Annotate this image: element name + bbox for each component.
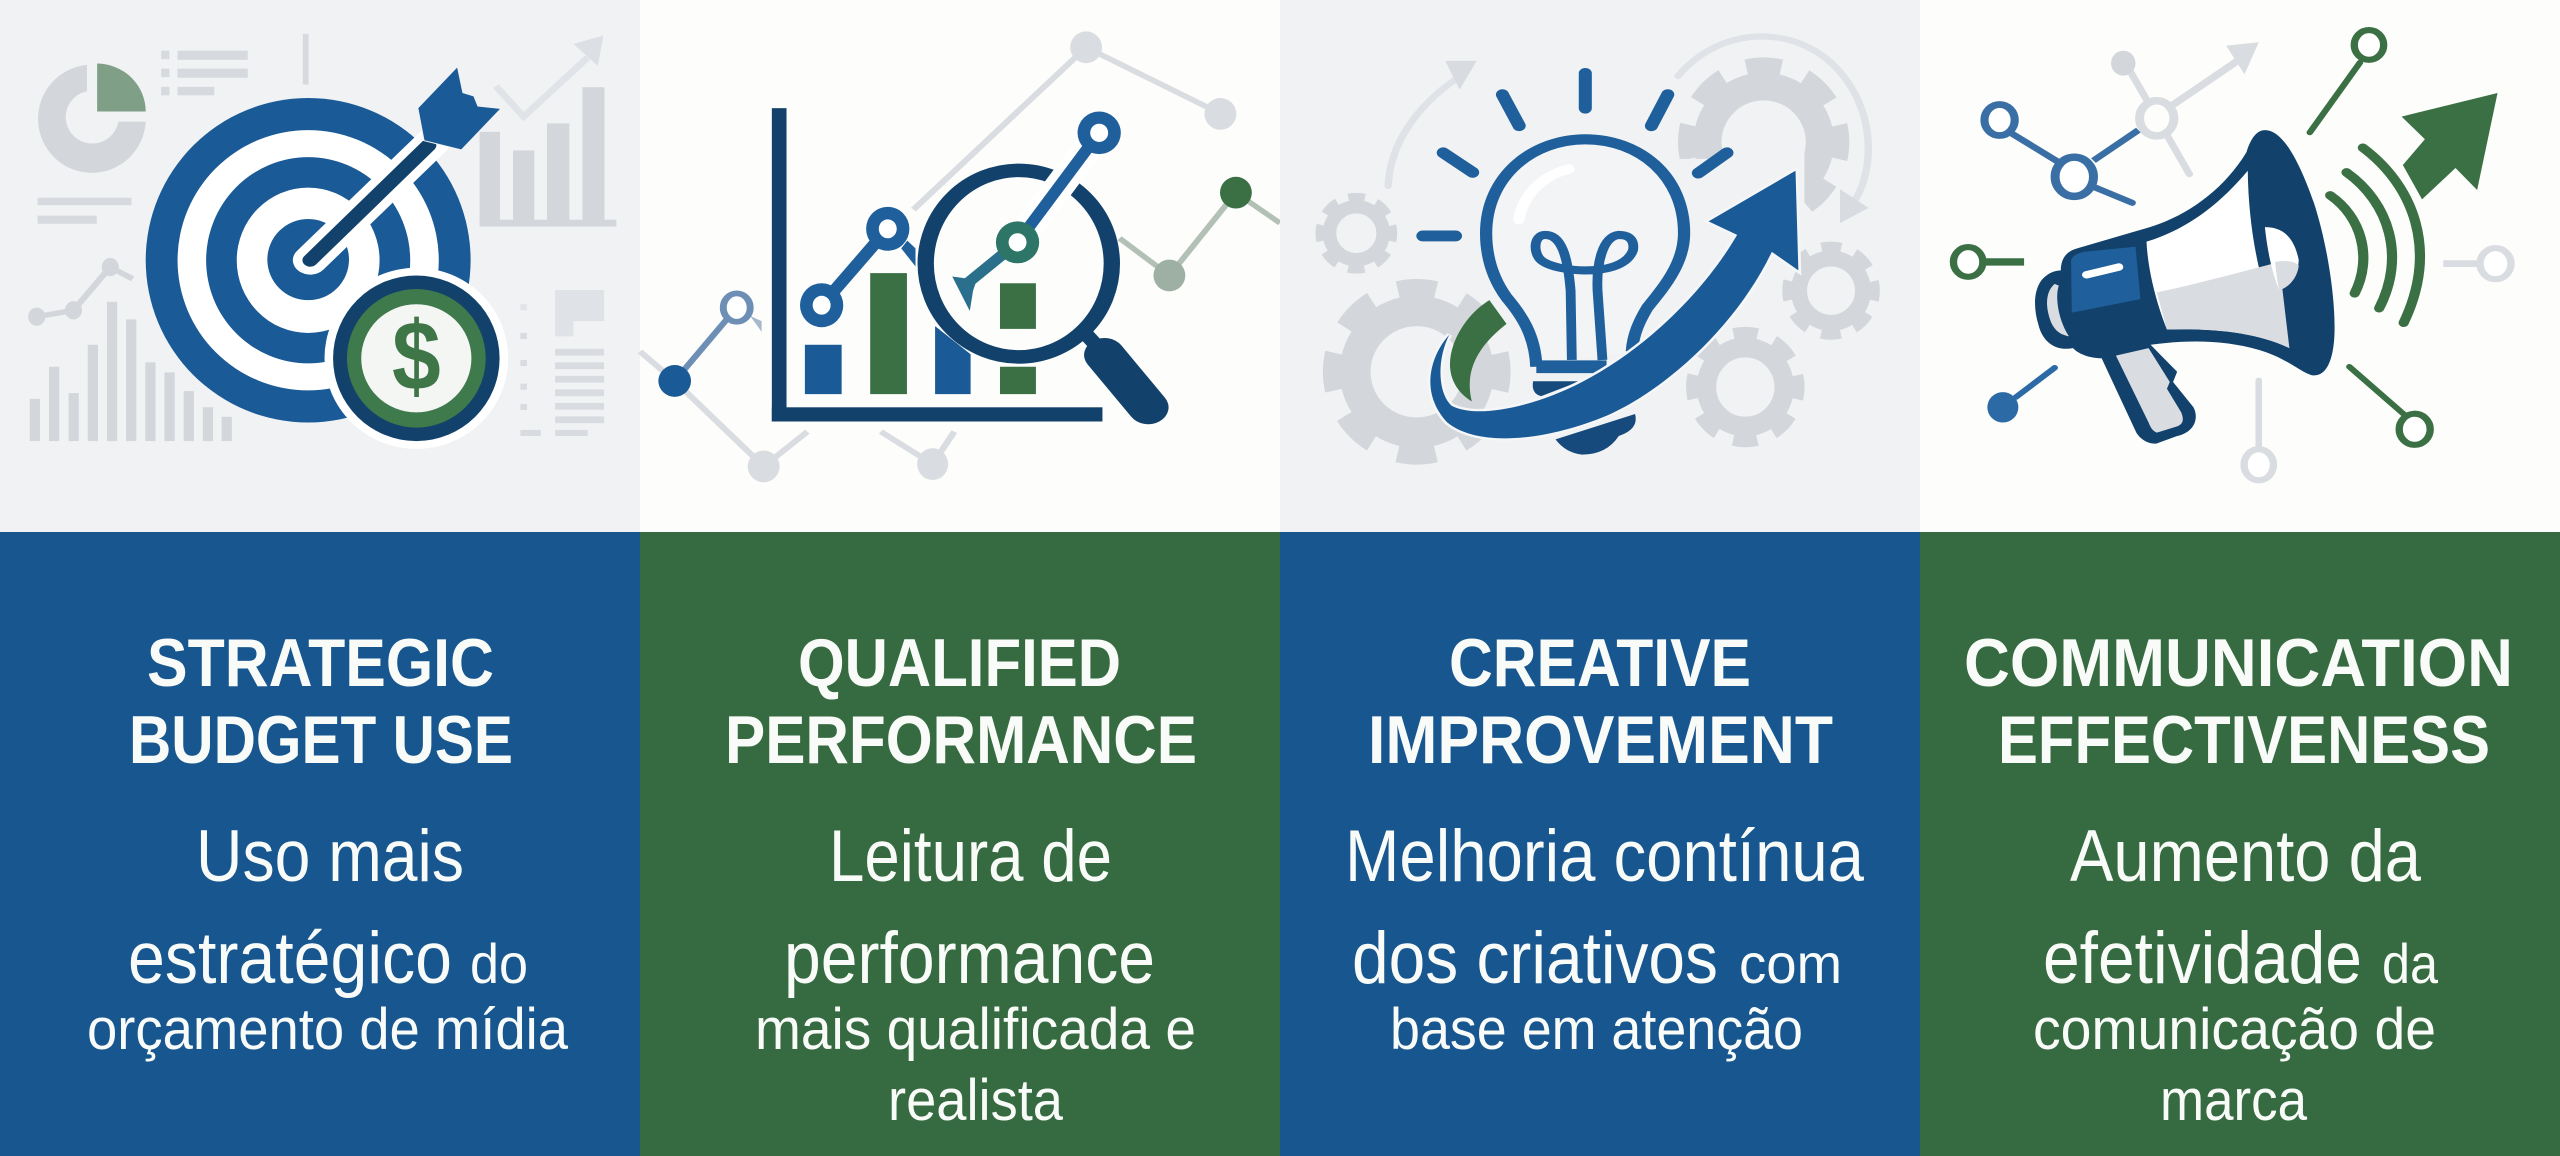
icon: green swoosh [1450, 300, 1507, 402]
illustration: chart with magnifier [640, 31, 1280, 482]
icon: background gears [1320, 66, 1875, 455]
illustration: light bulb with gears and arrow [1320, 36, 1875, 455]
description text: comunicação de [2033, 997, 2436, 1062]
heading [1280, 532, 1920, 1156]
background network lines [640, 47, 1220, 466]
icon: magnifying glass [926, 170, 1148, 407]
description text: base em atenção [1390, 997, 1803, 1062]
heading: COMMUNICATION [1964, 625, 2513, 701]
right green line series [1120, 177, 1280, 291]
arrow: left circular grey arrow [1388, 61, 1477, 186]
illustration: target with arrow and coin [28, 34, 616, 449]
heading [1920, 532, 2560, 1156]
description text: realista [888, 1068, 1064, 1133]
panel: creative improvement [1280, 0, 1920, 1156]
panel background [1280, 0, 1920, 532]
icon: background bar chart with trend arrow [480, 35, 616, 226]
icon: background document [520, 290, 604, 436]
icon: light rays [1423, 73, 1727, 236]
arrow: green up arrow [2402, 93, 2498, 199]
arrow: right circular grey arrow [1678, 36, 1869, 223]
trend line left [800, 207, 916, 327]
heading: BUDGET USE [129, 702, 513, 778]
description text: Uso mais [196, 816, 464, 897]
icon: background column chart with line [28, 258, 232, 441]
description text: marca [2160, 1068, 2308, 1133]
heading [640, 532, 1280, 1156]
icon: sound waves [2330, 148, 2420, 323]
description text: performance [784, 918, 1155, 999]
description text: da [2382, 932, 2439, 995]
description text: com [1739, 932, 1842, 995]
bars [805, 273, 1036, 394]
icon: target rings [146, 98, 471, 423]
left faded line series [658, 293, 762, 397]
heading: QUALIFIED [798, 625, 1121, 701]
panel: qualified performance [640, 0, 1280, 1156]
description text: Leitura de [829, 816, 1112, 897]
description text: efetividade [2043, 918, 2362, 999]
description text: mais qualificada e [755, 997, 1196, 1062]
blue network [1984, 104, 2138, 203]
background nodes [748, 31, 1236, 482]
arrow: blue rising swoosh [1430, 171, 1798, 438]
description text: Aumento da [2070, 816, 2421, 897]
panel background [1920, 0, 2560, 532]
heading: CREATIVE [1449, 625, 1751, 701]
trend line in lens [952, 112, 1121, 311]
icon: dollar coin [324, 268, 508, 449]
icon: arrow in target [310, 68, 500, 260]
heading: STRATEGIC [147, 625, 494, 701]
heading: IMPROVEMENT [1368, 702, 1833, 778]
icon: donut chart [38, 64, 146, 173]
heading [0, 532, 640, 1156]
gear mask [1668, 142, 1860, 237]
icon: megaphone [2035, 130, 2335, 444]
description text [755, 816, 1196, 1133]
panel: strategic budget use [0, 0, 640, 1156]
panel background [640, 0, 1280, 532]
description text: orçamento de mídia [87, 997, 569, 1062]
description text [87, 816, 569, 1062]
description text [2033, 816, 2439, 1133]
panel: communication effectiveness [1920, 0, 2560, 1156]
chart axes [772, 108, 1102, 421]
heading: EFFECTIVENESS [1998, 702, 2490, 778]
description text: dos criativos [1352, 918, 1718, 999]
illustration: megaphone with network [1953, 30, 2511, 480]
icon: light bulb [1486, 139, 1684, 455]
icon: dollar coin: $ [392, 301, 441, 410]
description text: estratégico [128, 918, 452, 999]
description text [1345, 816, 1864, 1062]
outer nodes [1953, 30, 2511, 480]
description text: do [470, 932, 528, 995]
icon: legend list [38, 34, 309, 224]
panel background [0, 0, 640, 532]
description text: Melhoria contínua [1345, 816, 1864, 897]
heading: PERFORMANCE [725, 702, 1197, 778]
background network with arrow [2111, 42, 2259, 174]
